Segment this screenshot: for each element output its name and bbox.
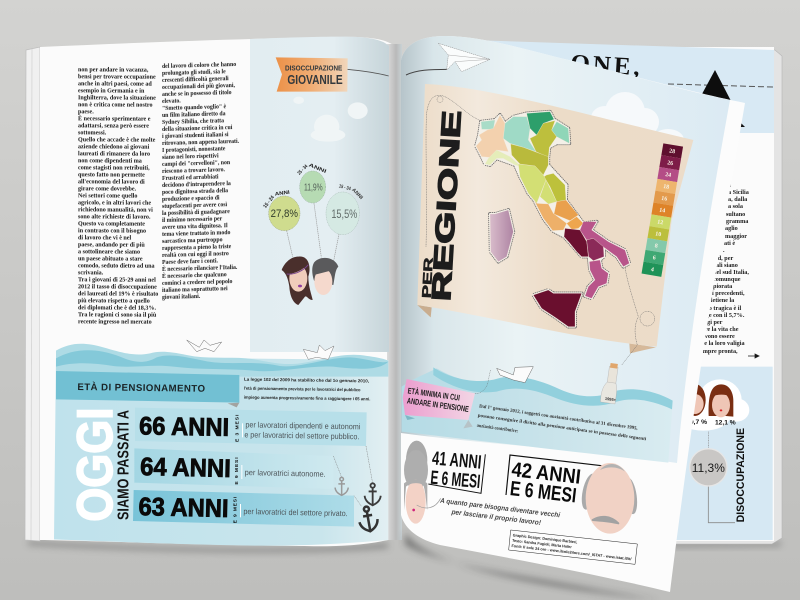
threads [426,95,655,365]
icon: grey anchor [335,477,348,495]
article text: left column: all'economia del lavoro di [78,179,145,186]
legend colour scale: 4 [650,267,654,273]
article text: left column: paese. [78,109,94,115]
article text: right column: riescono a trovare lavoro. [162,167,225,175]
article text: left column: laureati di rimanere da loro [78,151,150,158]
face: elderly woman [404,441,428,524]
article text: left column: un paese abituato a stare [78,256,143,263]
article text fragments: del sud Italia, [713,269,749,276]
balloon: 25-34 anni: ANNI [308,162,328,175]
article text: left column [78,67,158,326]
intro paragraph: impiego aumenta progressivamente fino a raggiungere i 65 anni. [244,395,370,401]
clouds on front page [591,92,684,151]
credits box: Testo: Sandra Fugioli, Marta Hofer [512,539,572,549]
article text: right column: realtà con cui oggi il nostro [162,251,229,259]
credits box: Fonti: Il sole 24 ore - www.ilsole24ore.com/_ISTAT - www.istat.it/it/ [511,544,633,561]
stitched outline [476,112,629,327]
icon: paper plane [406,43,490,75]
article text: right column: i giovani studenti italiani si [162,132,229,140]
page stack edge [600,46,782,544]
sea panel [54,357,388,546]
balloon: 25-34 anni: 25 - 34 [297,164,309,176]
legend colour scale: 10 [655,231,662,238]
article text: right column: della situazione critica in cui [162,125,233,133]
face: girl [282,257,313,305]
article text: left column: Inghilterra, dove la situazione [78,95,156,102]
box: 41 anni e 6 mesi [428,448,485,493]
row: 64 anni: 64 ANNI [140,453,231,483]
legend colour scale: 16 [661,196,668,203]
article text fragments: zo tragica è il [706,305,741,312]
credits box [509,530,637,564]
row: 63 anni: 63 ANNI [138,493,229,523]
caption pointer [417,498,441,508]
balloon: 15-24 anni: 15 - 24 [263,195,276,210]
icon: dark anchor [365,483,381,505]
article text: right column: avere una vita dignitosa. Il [162,223,228,231]
article text: right column: decidono d'intraprendere la [162,181,231,189]
article text: right column: rappresenta a pieno la triste [162,244,232,252]
article text: right column: I protagonisti, nonostante [162,146,226,154]
article text fragments: comunque [713,276,741,283]
article text: left column: non per andare in vacanza, [78,67,149,74]
shadow under the right back page [670,541,782,548]
paper boat [187,340,222,352]
article text fragments: empre pronta, [700,348,738,355]
regions [476,112,629,327]
balloon: 15-24 anni [263,190,300,231]
dashed divider and triangle [668,70,773,127]
article text fragments: ni [728,145,733,152]
article text: right column: campi dei "cervelloni", non [162,160,231,168]
clouds [293,97,368,142]
article text: right column: È necessario rilanciare l'Italia. [162,263,238,273]
intro paragraph [244,377,371,401]
article text: left column: in contrasto con il bisogno [78,228,146,235]
article text fragments: piorata [713,283,732,290]
article text: left column: dei laureati del 19% è risultato [78,291,158,298]
blue upper area [401,36,730,463]
panel: minimum age section [402,362,673,564]
heading: siamo passati a: SIAMO PASSATI A [115,410,132,520]
message thread [474,370,491,394]
article text: left column: Tra le ragioni ci sono sia il più [78,312,157,319]
cloud with faces [677,379,749,431]
article text: right column: stupefacenti per avere così [162,202,227,210]
row: 66 anni [135,408,367,446]
row: 63 anni [133,490,354,527]
article text: left column: come stagisti non retribuiti, [78,165,150,172]
heading fragment: ONE, [570,50,644,81]
balloon: 15-24 anni: 27,8% [271,208,298,220]
article text fragments: sultano [726,211,745,218]
article text: right column: sarcastico ma purtroppo [162,237,223,245]
legend colour scale: 14 [659,208,666,215]
credits box: Graphic Design: Dominique Barbieri, [513,533,578,544]
balloon strings [287,203,339,263]
waves [433,367,673,409]
article text: left column: non è critica come nel nostro [78,102,153,109]
upper blue panel [250,37,389,352]
article text: left column: più elevato rispetto a quello [78,298,150,305]
article text: right column: elevato. [162,98,181,105]
balloon: 15-34 anni: 15,5% [331,208,357,221]
article text fragments: a sola [728,203,743,210]
article text: right column: tema viene trattato in modo [162,230,230,238]
ribbon [417,84,693,347]
face: woman [709,384,733,417]
article text: left column: anche in altri paesi, come ad [78,81,152,88]
shadow under the left page [28,541,388,552]
article text: right column: Sydney Sibilia, che tratta [162,118,224,126]
article text fragments: gramma [726,218,748,225]
article text: left column: sottomessi. [78,130,107,136]
article text: right column: un film italiano diretto da [162,111,226,119]
article text: left column: scrivania. [78,270,104,276]
article text: left column: recente ingresso nel mercato [78,319,152,326]
article text: left column: bensì per trovare occupazione [78,74,156,81]
heading: oggi: OGGI [67,408,123,522]
article text: left column: agricolo, e in altri lavori che [78,200,151,207]
face: man, partly hidden [684,384,706,416]
arrow: continues [748,354,759,358]
line from banner to spine [347,69,389,76]
row: 64 anni: per lavoratrici autonome. [245,468,326,479]
caption: a quanto pare: per lasciare il proprio lavoro! [450,509,542,527]
label: età minima [403,379,475,428]
banner: disoccupazione giovanile [276,57,348,92]
article text fragments: e e la loro valigia [700,340,745,347]
legend colour scale: 6 [652,255,656,262]
balloon: 15-24 anni: ANNI [274,190,291,198]
sea area [402,368,673,463]
article text fragments: detiene la [709,297,734,304]
page stack edge [25,47,40,541]
article text: left column: aziende chiedono ai giovani [78,144,150,151]
row: 66 anni: per lavoratori dipendenti e autonomi [245,420,361,431]
article text: right column: crescenti difficoltà generali [162,76,229,84]
article text: right column: È necessario che qualcuno [162,270,227,280]
article text: left column: questo fatto non permette [78,172,145,179]
article text: right column: poco dignitosa strada della [162,188,228,196]
panel: left page [25,37,402,546]
article text: right column: italiano ma soprattutto nei [162,286,228,294]
article text: right column: del lavoro di coloro che hanno [162,62,236,70]
article text fragments: evono essere [702,333,735,340]
article text: left column: esempio in Germania e in [78,88,145,95]
legend colour scale: 12 [657,219,664,226]
legend colour scale: 8 [654,243,658,250]
paragraph: dal 1 gennaio 2012: possono conseguire il diritto alla pensione anticipata se in possesso delle seguenti [477,414,647,442]
article text fragments [700,145,749,355]
article text fragments: ige con il 5,7%. [704,312,745,319]
article text: left column: girare come dovrebbe. [78,186,137,193]
balloon: 25-34 anni [297,162,328,203]
map banner: per regione [417,84,693,365]
article text fragments: . [723,247,725,254]
paper boat on the wave [303,345,334,359]
article text: right column: ritrovano, non appena laureati. [162,139,240,147]
article text: right column: produzione e spaccio di [162,195,220,203]
box: 41 anni e 6 mesi: 41 ANNI [431,448,482,474]
article text: right column: siano nei loro rispettivi [162,153,219,161]
legend colour scale [642,143,683,277]
article text fragments: aglio [725,225,738,232]
article text: left column: sono alte richieste di lavoro. [78,214,151,221]
paragraph: dal 1 gennaio 2012: Dal 1° gennaio 2012, i soggetti con anzianità contributiva al 31 dicembre 1995, [479,404,639,432]
banner: disoccupazione giovanile: GIOVANILE [287,73,343,87]
heading bar: età di pensionamento [56,371,239,407]
article text: left column: comodo, seduto dietro ad una [78,263,155,270]
balloon: 15-34 anni [326,183,364,235]
heading: per: PER [420,257,436,298]
balloon: 15-34 anni: 15 - 34 [338,183,351,192]
article text: right column: Frustrati ed arrabbiati [162,174,219,182]
article text: right column: occupazionali dei più giovani, [162,83,235,91]
section: disoccupazione giovanile graphic [263,57,389,305]
anchor ropes [333,446,373,507]
article text: left column: dei diplomati che è del 18,3%. [78,305,157,312]
article text: left column: non come dipendenti ma [78,158,142,165]
article text: left column: Nei settori come quello [78,193,137,200]
balloon: 15-34 anni: ANNI [350,187,364,201]
article text fragments: a, dalla [728,196,747,203]
row: 66 anni: e per lavoratrici del settore pubblico. [244,430,359,441]
row: 66 anni: E 3 MESI [234,414,240,442]
label: età minima: ETÀ MINIMA IN CUI [407,385,461,403]
ribbon folds [417,305,432,317]
top blue header band [470,40,774,133]
article text: left column: di lavoro che vi è nel [78,235,132,242]
panel: pension ages [54,340,388,546]
article text: left column: Tra i giovani di 25-29 anni nel [78,277,156,284]
article text: right column: anche se in possesso di titolo [162,90,232,98]
article text: left column: paese, andando per di più [78,242,145,249]
legend colour scale: 24 [665,172,672,179]
heading: regione: REGIONE [426,110,467,302]
article text fragments: a Sicilia [728,189,749,196]
box: 42 anni e 6 mesi: E 6 MESI [509,477,578,508]
intro paragraph: La legge 102 del 2009 ha stabilito che dal 1o gennaio 2010, [244,377,369,383]
box: 42 anni e 6 mesi [506,455,602,508]
legend colour scale: 18 [663,184,670,191]
article text fragments: ggi per [704,319,723,326]
icon: large anchor [357,505,379,533]
white page [40,37,396,546]
article text fragments: i precedenti, [712,290,745,297]
paragraph: dal 1 gennaio 2012: anzianità contributive: [476,424,519,434]
box: 41 anni e 6 mesi: E 6 MESI [430,468,481,493]
article text: right column [162,62,240,301]
intro paragraph: l'età di pensionamento prevista per le lavoratrici del pubblico [244,386,361,392]
circle: 11,3% [690,449,727,486]
panel: lower blue unemployment panel: 12,1 % [715,420,736,427]
article text fragments: id, per [716,255,733,262]
heading bar: età di pensionamento: ETÀ DI PENSIONAMENTO [77,382,206,395]
waves [56,344,388,377]
article text: left column: Quello che accade è che molte [78,137,156,144]
article text: right column: Paese deve fare i conti. [162,258,218,266]
shadow under turning page [405,532,660,600]
article text: left column: richiedono manualità, non vi [78,207,153,214]
connector lines [708,432,735,523]
page sheet [401,36,745,592]
row: 66 anni: 66 ANNI [139,412,229,442]
article text fragments: o [728,167,731,174]
article text: right column: il minimo necessario per [162,216,223,224]
legend colour scale: 26 [667,160,674,167]
page sheet [600,47,774,541]
article text: left column: adattarsi, senza però essere [78,123,149,130]
icon: message bottle [600,362,622,404]
article text: right column: la possibilità di guadagnare [162,209,230,217]
vertical heading: disoccupazione: DISOCCUPAZIONE [735,428,747,522]
panel: front turning page [401,36,745,600]
legend colour scale: 28 [669,148,675,155]
circle: 11,3%: 11,3% [692,461,725,475]
panel: lower blue unemployment panel [620,367,773,540]
spine shading [387,44,402,540]
caption: a quanto pare: A quanto pare bisogna diventare vecchi [439,498,561,519]
article text: left column: È necessario sperimentare e [78,114,151,123]
row: 63 anni: E 9 MESI [233,496,239,523]
balloon: 25-34 anni: 11,9% [304,182,323,193]
article text: right column: "Smetto quando voglio" è [162,104,226,112]
row: 63 anni: per lavoratrici del settore privato. [243,507,348,518]
icon: message bottle: 1995+ [605,396,617,402]
article text: right column: giovani italiani. [162,294,201,301]
article text: left column: a sottolineare che siamo [78,249,140,256]
article text: right column: prolungato gli studi, sia le [162,69,226,77]
box: 42 anni e 6 mesi: 42 ANNI [510,458,582,489]
banner: disoccupazione giovanile: DISOCCUPAZIONE [285,64,342,73]
article text: left column: Questo va completamente [78,221,145,228]
face: boy [312,258,338,295]
article text fragments: ali siano [716,262,738,269]
article text fragments: ere la vita che [702,326,739,333]
percentages on cloud: 0,7 % [690,419,707,426]
label: età minima: ANDARE IN PENSIONE [406,395,470,414]
article text: right column: cominci a credere nel popolo [162,279,232,287]
article text fragments: no [728,153,735,160]
article text fragments: ati è [724,240,735,247]
row: 64 anni: E 9 MESI [234,457,240,485]
article text fragments: maggior [725,233,747,240]
face: elderly man [579,463,639,534]
map of Italy regions [476,112,629,327]
article text fragments: a [728,182,731,189]
row: 64 anni [134,448,333,489]
paper boat [497,367,533,383]
article text: left column: 2012 il tasso di disoccupazione [78,284,157,291]
panel: back right page [470,40,782,544]
